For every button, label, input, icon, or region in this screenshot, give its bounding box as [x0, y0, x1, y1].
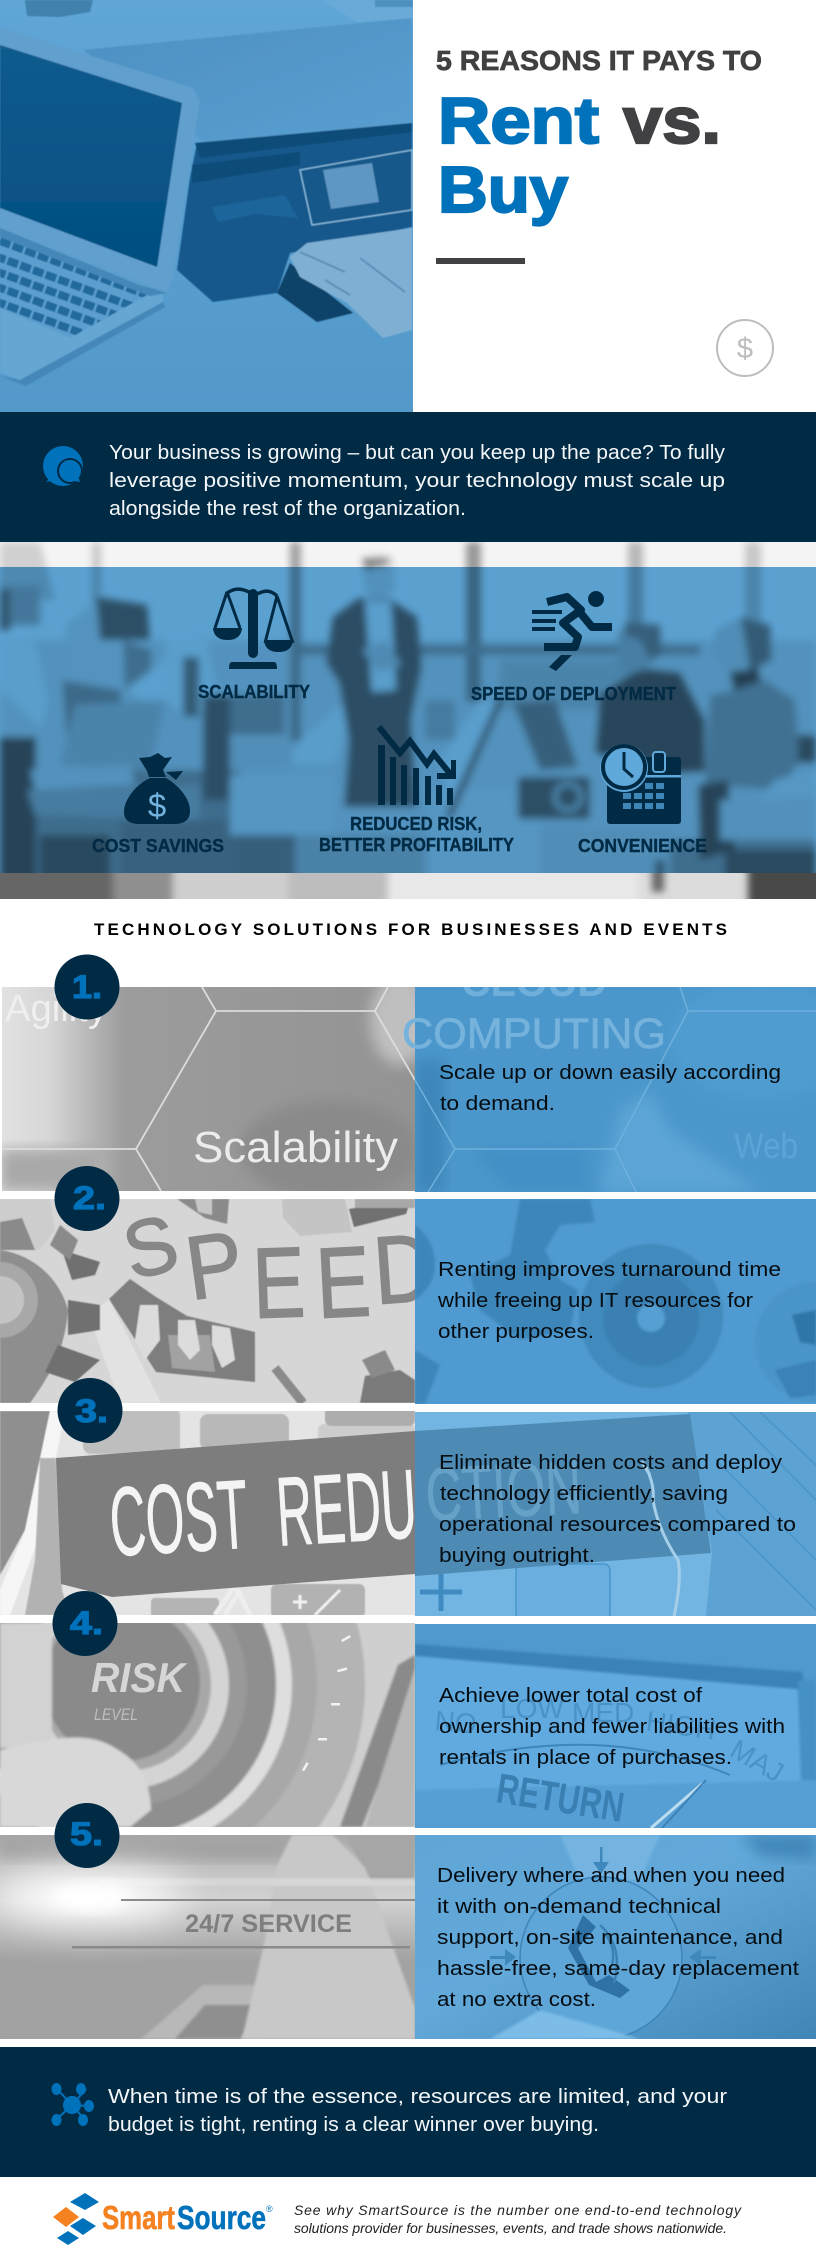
number badge 1: [54, 954, 120, 1020]
title: vs.: vs.: [623, 84, 721, 157]
number badge 2: [54, 1166, 120, 1231]
blue overlay band: [0, 567, 816, 873]
row 5 text: at no extra cost.: [437, 1989, 596, 2011]
row 5 text: Delivery where and when you need: [437, 1865, 785, 1887]
closing text: When time is of the essence, resources are limited, and your: [108, 2086, 727, 2108]
number badge 4: [52, 1591, 118, 1656]
closing band: [0, 2047, 816, 2177]
row 4 panel: blue with text: [415, 1624, 816, 1831]
row 1 panel: blue with text: Web: [734, 1125, 798, 1166]
icon: chat bubbles: [43, 446, 83, 486]
label: scalability: SCALABILITY: [198, 681, 311, 702]
row 2 photo: speed gears: S: [115, 1198, 187, 1296]
row 2 photo: speed gears: [0, 1198, 437, 1403]
footer logo: SmartSource: [53, 2193, 273, 2245]
office interior blur: [215, 695, 285, 735]
footer logo: SmartSource: Source: [177, 2199, 266, 2236]
row 4 text: ownership and fewer liabilities with: [439, 1716, 785, 1738]
row 4 panel: blue with text: HIGH: [644, 1705, 718, 1746]
row 5 text: it with on-demand technical: [437, 1896, 721, 1918]
row 2 text: while freeing up IT resources for: [437, 1290, 753, 1312]
row 3 text: Eliminate hidden costs and deploy: [439, 1452, 782, 1474]
top dark gaps: [177, 1199, 229, 1224]
row 4 photo: risk dial: LEVEL: [94, 1705, 138, 1724]
row 5 panel: blue with text: [415, 1835, 816, 2039]
feature: reduced risk: [319, 727, 515, 855]
row 5 photo: 24/7 service: 24/7 SERVICE: [185, 1910, 352, 1938]
row 1 photo: scalability: Agility: [5, 988, 107, 1030]
row 2 photo: speed gears: D: [370, 1214, 437, 1325]
number badge 4: 4.: [70, 1605, 103, 1641]
footer tagline: solutions provider for businesses, events, and trade shows nationwide.: [294, 2220, 727, 2236]
row 2 panel: blue with text: [415, 1199, 816, 1404]
row 4 text: rentals in place of purchases.: [439, 1747, 732, 1769]
bottom photo strip: [0, 873, 816, 899]
title block: [436, 45, 762, 226]
row 3 text: buying outright.: [439, 1545, 595, 1567]
left people: [0, 640, 47, 728]
row 4 panel: blue with text: MAJ: [725, 1733, 789, 1788]
row 1 panel: blue with text: [404, 987, 816, 1192]
row 2 text: other purposes.: [438, 1321, 594, 1343]
icon: running figure: [532, 591, 612, 671]
label: reduced risk: REDUCED RISK,: [350, 813, 482, 834]
label: cost savings: COST SAVINGS: [92, 835, 224, 856]
number badge 3: [58, 1378, 122, 1443]
row 3 panel: blue with text: CTION: [423, 1445, 584, 1538]
label: convenience: CONVENIENCE: [578, 835, 707, 856]
icon: network nodes: [52, 2083, 94, 2126]
row 2 text: Renting improves turnaround time: [438, 1259, 781, 1281]
row 3 text: [439, 1452, 796, 1567]
right laptops and people: [445, 697, 504, 818]
row 4 text: Achieve lower total cost of: [439, 1685, 702, 1707]
title rule: [436, 258, 525, 264]
row 2 text: [437, 1259, 781, 1343]
intro text: Your business is growing – but can you keep up the pace? To fully: [109, 442, 725, 464]
icon: dollar circle: $: [737, 333, 753, 365]
row 1 photo: scalability: Scalability: [193, 1123, 398, 1172]
row 4 panel: blue with text: MED: [572, 1697, 634, 1728]
label: reduced risk: BETTER PROFITABILITY: [319, 834, 515, 855]
row 3 photo: cost reduction: [0, 1405, 420, 1618]
row 2 photo: speed gears: E: [313, 1225, 373, 1340]
closing text: budget is tight, renting is a clear winner over buying.: [108, 2114, 599, 2136]
feature: convenience: [578, 744, 707, 856]
title: kicker: 5 REASONS IT PAYS TO: [436, 45, 762, 76]
footer tagline: See why SmartSource is the number one end-to-end technology: [294, 2202, 742, 2218]
footer logo: SmartSource: ®: [266, 2204, 273, 2214]
intro text: leverage positive momentum, your technology must scale up: [109, 470, 725, 492]
row 4 panel: blue with text: RETURN: [494, 1764, 627, 1831]
row 5 text: [437, 1865, 800, 2011]
row 1 text: Scale up or down easily according: [439, 1062, 781, 1084]
row 4 panel: blue with text: LOW: [500, 1693, 564, 1724]
hero photo: laptop and printer in blue duotone: [0, 0, 413, 412]
number badge 1: 1.: [72, 969, 102, 1005]
row 4 photo: risk dial: [0, 1623, 415, 1827]
row 2 photo: speed gears: E: [251, 1226, 307, 1340]
row 3 photo: cost reduction: REDU: [273, 1448, 420, 1567]
team photo with blue band: [0, 542, 816, 910]
number badge 3: 3.: [75, 1393, 108, 1429]
row 5 text: hassle-free, same-day replacement: [437, 1958, 800, 1980]
row 4 photo: risk dial: RISK: [91, 1654, 187, 1701]
number badge 2: 2.: [73, 1180, 106, 1216]
row 4 text: [439, 1685, 785, 1769]
row 1 panel: blue with text: CLOUD: [461, 958, 607, 1006]
label: reduced risk: [319, 813, 515, 855]
icon: calendar and clock: [600, 744, 681, 824]
gap under the speed gear: [109, 1279, 255, 1382]
number badge 5: 5.: [70, 1816, 103, 1852]
row 2 photo: speed gears: P: [180, 1213, 249, 1320]
row 1 text: to demand.: [440, 1093, 555, 1115]
logo diamonds: [53, 2193, 99, 2245]
intro text: alongside the rest of the organization.: [109, 498, 466, 520]
row 3 panel: blue with text: [415, 1412, 816, 1620]
title: Buy: Buy: [438, 153, 568, 226]
row 3 text: operational resources compared to: [439, 1514, 796, 1536]
icon: money bag: $: [148, 787, 166, 824]
label: speed of deployment: SPEED OF DEPLOYMENT: [471, 683, 677, 704]
feature: cost savings: [92, 753, 224, 856]
intro band: [0, 412, 816, 542]
intro text: [109, 442, 725, 520]
row 1 panel: blue with text: COMPUTING: [402, 1010, 666, 1058]
row 3 text: technology efficiently, saving: [440, 1483, 728, 1505]
icon: balance scales: [213, 589, 293, 669]
feature: speed of deployment: [471, 591, 677, 704]
closing text: [108, 2086, 727, 2136]
section heading: TECHNOLOGY SOLUTIONS FOR BUSINESSES AND EVENTS: [94, 920, 727, 939]
left small gear: [0, 1250, 68, 1403]
presenter: [362, 562, 396, 600]
number badge 5: [54, 1803, 120, 1868]
title: Rent: Rent: [438, 84, 599, 157]
feature: scalability: [198, 589, 311, 702]
row 5 photo: 24/7 service: [0, 1835, 417, 2039]
row 3 photo: cost reduction: COST: [107, 1459, 251, 1577]
lower floor tones: [31, 766, 240, 873]
footer logo: SmartSource: Smart: [102, 2199, 175, 2236]
row 4 panel: blue with text: NO: [433, 1705, 478, 1740]
footer tagline: [294, 2202, 742, 2236]
row 1 photo: scalability: [2, 987, 415, 1191]
row 5 text: support, on-site maintenance, and: [437, 1927, 783, 1949]
icon: dollar circle: [717, 320, 773, 376]
icon: declining bar chart: [378, 727, 456, 805]
row 1 text: [439, 1062, 781, 1115]
